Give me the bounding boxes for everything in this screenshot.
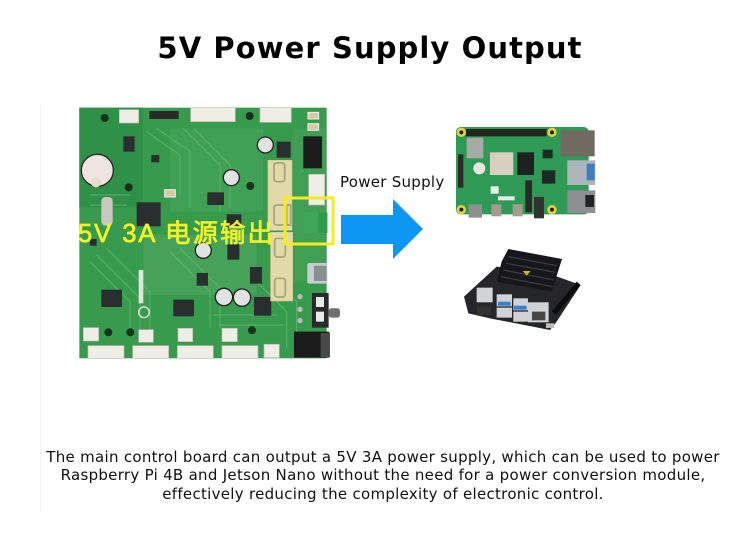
connectors xyxy=(83,108,325,358)
buzzer xyxy=(81,154,113,186)
description text: Raspberry Pi 4B and Jetson Nano without the need for a power conversion module, xyxy=(61,466,705,484)
description text: effectively reducing the complexity of electronic control. xyxy=(162,485,604,503)
title: 5V Power Supply Output xyxy=(157,31,583,65)
description text xyxy=(46,448,720,503)
capacitors xyxy=(195,137,273,306)
DC jack xyxy=(294,332,329,358)
yellow highlight box xyxy=(285,198,333,244)
relay / fuse modules xyxy=(268,160,293,301)
USB-C port xyxy=(307,263,327,284)
crystal xyxy=(101,197,113,226)
green terminal block xyxy=(304,212,327,233)
blue arrow xyxy=(341,199,423,259)
label: 5V 3A output: 5V 3A 电源输出 xyxy=(78,220,273,248)
chips xyxy=(90,136,291,316)
Jetson Nano xyxy=(464,249,581,330)
label: power supply: Power Supply xyxy=(340,173,444,191)
holes xyxy=(101,112,256,336)
description text: The main control board can output a 5V 3A power supply, which can be used to power xyxy=(46,448,720,466)
Raspberry Pi 4B xyxy=(456,127,595,218)
main control board xyxy=(79,108,340,358)
logo xyxy=(139,307,149,318)
power switch xyxy=(312,293,329,328)
